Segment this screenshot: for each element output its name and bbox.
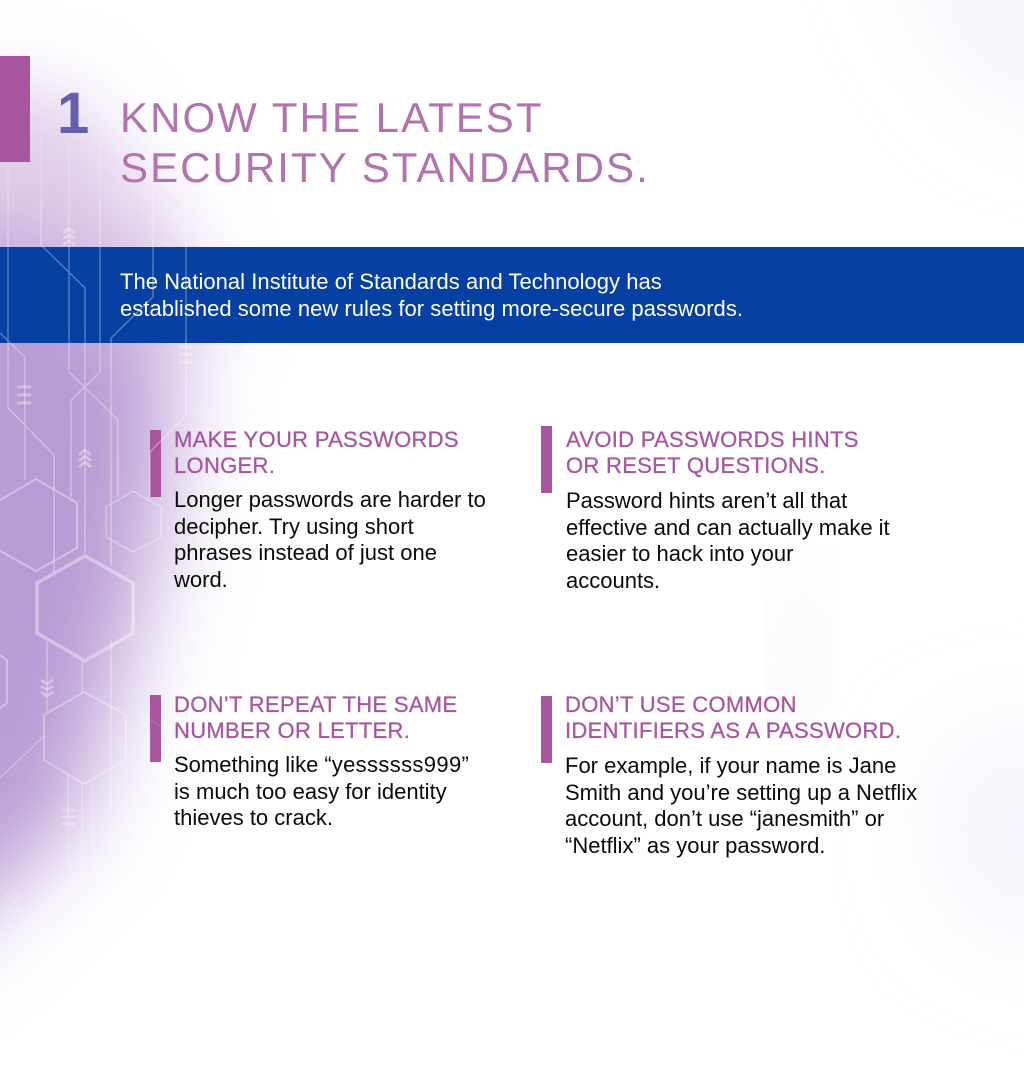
step number: 1 — [57, 81, 89, 146]
tip text: For example, if your name is Jane — [565, 753, 896, 778]
banner text — [120, 269, 743, 321]
tip: common identifiers — [541, 692, 917, 858]
tip text: Smith and you’re setting up a Netflix — [565, 780, 917, 805]
tip heading: NUMBER OR LETTER. — [174, 718, 410, 743]
tip text: thieves to crack. — [174, 805, 333, 830]
tip heading: LONGER. — [174, 453, 275, 478]
tip bar — [150, 430, 161, 497]
circuit bars and chevrons — [6, 229, 193, 911]
tip bar — [150, 695, 161, 762]
tip text: account, don’t use “janesmith” or — [565, 806, 884, 831]
tip text: accounts. — [566, 568, 660, 593]
tip heading: AVOID PASSWORDS HINTS — [566, 427, 859, 452]
tip heading — [174, 427, 459, 478]
tip heading: DON’T USE COMMON — [565, 692, 797, 717]
tip heading: DON’T REPEAT THE SAME — [174, 692, 457, 717]
title — [120, 94, 650, 191]
blue banner — [0, 247, 1024, 343]
tip text — [565, 753, 917, 858]
tip text: phrases instead of just one — [174, 540, 437, 565]
tip heading — [565, 692, 901, 743]
tip text: Something like “yessssss999” — [174, 752, 469, 777]
tip bar — [541, 696, 552, 763]
tip text: easier to hack into your — [566, 541, 793, 566]
tip heading — [566, 427, 859, 478]
accent tab — [0, 56, 30, 162]
banner text: The National Institute of Standards and Technology has — [120, 269, 662, 294]
tip text: Password hints aren’t all that — [566, 488, 847, 513]
tip bar — [541, 426, 552, 493]
tip text — [174, 752, 469, 830]
tip text: word. — [174, 567, 228, 592]
tip text: is much too easy for identity — [174, 779, 447, 804]
tip heading — [174, 692, 457, 743]
tip text: Longer passwords are harder to — [174, 487, 486, 512]
tip heading: MAKE YOUR PASSWORDS — [174, 427, 459, 452]
banner text: established some new rules for setting more-secure passwords. — [120, 296, 743, 321]
title: KNOW THE LATEST — [120, 94, 544, 141]
tip: don't repeat — [150, 692, 469, 830]
tip: make your passwords longer — [150, 427, 486, 592]
title: SECURITY STANDARDS. — [120, 144, 650, 191]
tip: avoid password hints — [541, 426, 890, 593]
tip text — [566, 488, 890, 593]
tip heading: OR RESET QUESTIONS. — [566, 453, 826, 478]
tip text: effective and can actually make it — [566, 515, 890, 540]
tip text — [174, 487, 486, 592]
tip text: “Netflix” as your password. — [565, 833, 825, 858]
tip heading: IDENTIFIERS AS A PASSWORD. — [565, 718, 901, 743]
tip text: decipher. Try using short — [174, 514, 414, 539]
